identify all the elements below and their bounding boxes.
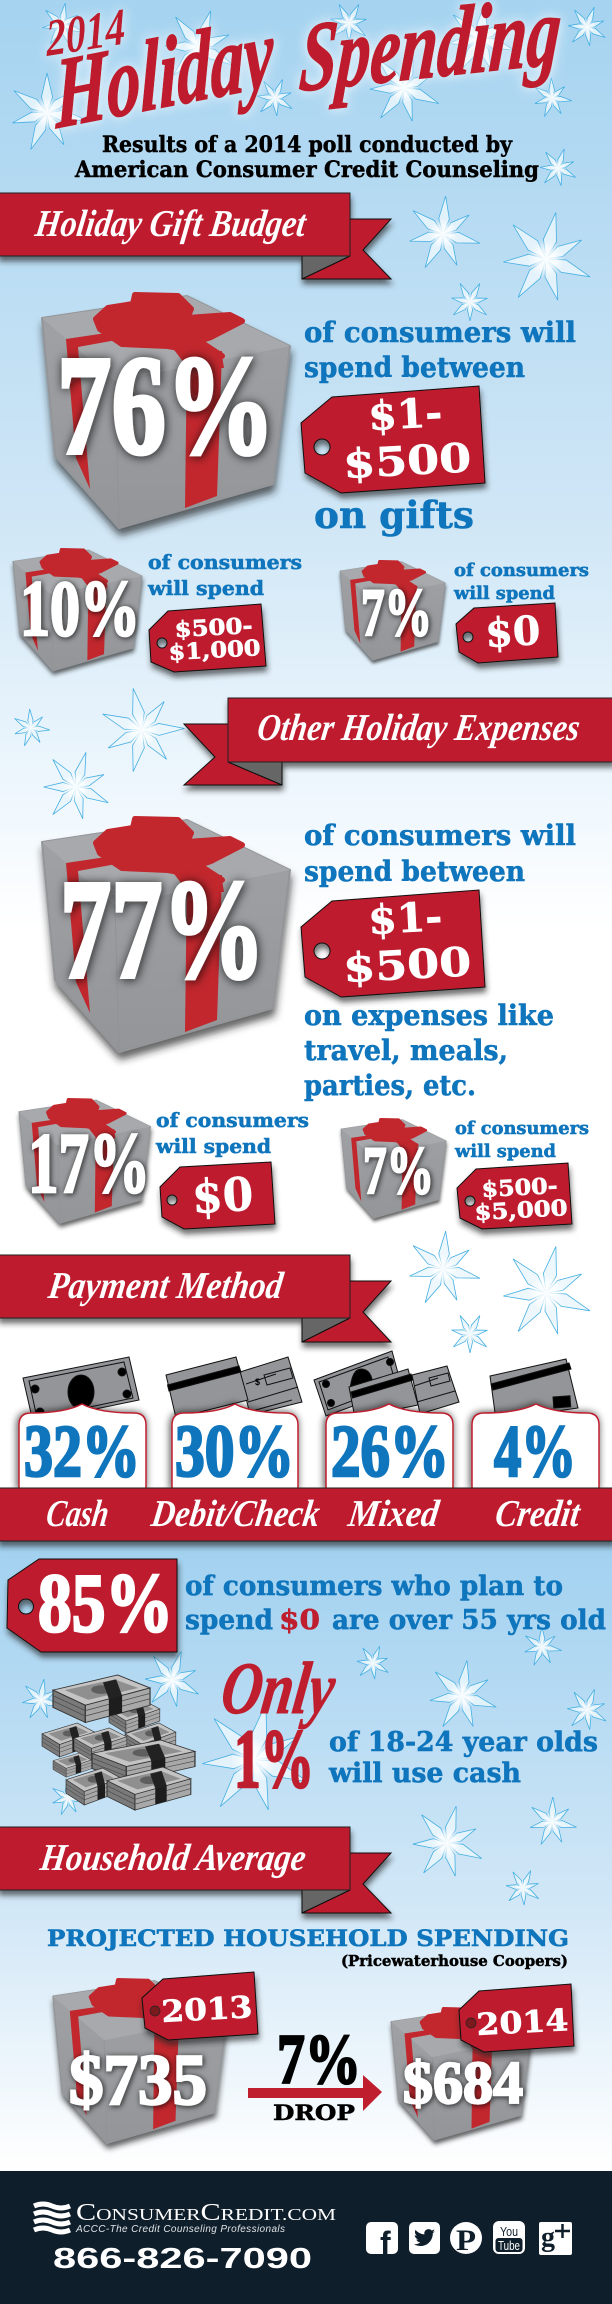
icon: facebook bbox=[366, 2222, 398, 2261]
payment method label band: Debit/Check bbox=[148, 1493, 323, 1535]
tag 2013 bbox=[142, 1972, 258, 2040]
payment method label band: Credit bbox=[493, 1493, 584, 1535]
text: on expenses like travel, meals, parties, etc.: travel, meals, bbox=[304, 1034, 508, 1067]
text: of consumers will spend between: spend between bbox=[304, 351, 525, 384]
arrow: 7% drop bbox=[248, 2021, 382, 2125]
tag 2014 bbox=[459, 1984, 574, 2052]
payment method label band: Cash bbox=[44, 1493, 112, 1535]
gift box 77%: 77% bbox=[60, 850, 265, 1008]
logo wordmark: CONSUMER CREDIT.COM bbox=[76, 2200, 336, 2226]
text: of consumers will spend (7%) bbox=[453, 560, 589, 604]
text: of consumers will spend between (77%): of consumers will bbox=[304, 819, 576, 852]
arrow: 7% drop: 7% bbox=[277, 2021, 361, 2099]
payment method label band bbox=[0, 1488, 612, 1541]
text: of 18-24 year olds will use cash: will use cash bbox=[328, 1758, 521, 1789]
text: 85% description: spend bbox=[185, 1605, 273, 1636]
ribbon heading: Household Average bbox=[0, 1827, 391, 1913]
icon: debit card and check: $ bbox=[255, 1377, 260, 1387]
ribbon heading: Other Holiday Expenses bbox=[184, 698, 612, 785]
heading: projected household spending: PROJECTED HOUSEHOLD SPENDING bbox=[47, 1926, 569, 1952]
text: of consumers will spend (10%): of consumers bbox=[148, 550, 302, 574]
text: of consumers will spend (17%): will spend bbox=[155, 1134, 271, 1158]
text: on expenses like travel, meals, parties, etc. bbox=[304, 999, 554, 1102]
card: cash 32%: 32% bbox=[24, 1411, 140, 1493]
icon: credit card bbox=[490, 1359, 578, 1420]
gift box 17% bbox=[19, 1100, 150, 1223]
icon: youtube: You bbox=[500, 2224, 518, 2239]
price tag $500-$1,000 bbox=[149, 604, 266, 672]
gift box 2013: $735 bbox=[53, 1972, 258, 2143]
gift box 7% bbox=[340, 561, 445, 660]
price tag $500-$1,000: $1,000 bbox=[168, 635, 261, 666]
gift box 7% (expenses) bbox=[341, 1119, 446, 1218]
ribbon heading: Payment Method bbox=[0, 1255, 391, 1342]
card: mixed 26%: 26% bbox=[331, 1411, 449, 1493]
text: of consumers will spend (7%): will spend bbox=[453, 583, 555, 604]
icon: pinterest: P bbox=[456, 2224, 476, 2257]
tag 2013: 2013 bbox=[161, 1990, 253, 2030]
price tag $1-$500 (expenses) bbox=[301, 890, 485, 997]
text: of consumers will spend (10%) bbox=[147, 550, 302, 600]
text: 85% description bbox=[185, 1571, 606, 1636]
price tag $1-$500 bbox=[301, 386, 485, 493]
card: credit 4%: 4% bbox=[494, 1411, 576, 1493]
price tag $1-$500: $1- bbox=[367, 389, 443, 440]
gift box 76%: 76% bbox=[57, 326, 275, 484]
price tag $500-$5,000: $5,000 bbox=[474, 1195, 568, 1226]
callout: Only 1%: 1% bbox=[234, 1713, 314, 1806]
upper background bbox=[0, 0, 612, 930]
gift box 17%: 17% bbox=[28, 1115, 150, 1211]
gift box 2013: $735: $735 bbox=[69, 2040, 207, 2120]
gift box 2014: $684: $684 bbox=[403, 2050, 523, 2116]
price tag $0 (17%): $0 bbox=[191, 1167, 254, 1224]
icon: debit card and check bbox=[166, 1357, 302, 1418]
icon: google plus bbox=[539, 2222, 572, 2255]
price tag $500-$5,000 bbox=[457, 1163, 572, 1229]
price tag $1-$500: $500 bbox=[342, 434, 472, 488]
panel: payment method percentages bbox=[19, 1404, 599, 1493]
ribbon heading: Household Average: Household Average bbox=[37, 1837, 309, 1879]
text: of 18-24 year olds will use cash bbox=[328, 1727, 598, 1789]
text: 85% description: $0 bbox=[279, 1605, 320, 1636]
gift box 77% bbox=[42, 819, 290, 1052]
text: on expenses like travel, meals, parties, etc.: on expenses like bbox=[304, 999, 554, 1032]
icon: twitter bbox=[409, 2222, 440, 2254]
lower background bbox=[0, 1541, 612, 2171]
text: of consumers will spend (7%): of consumers bbox=[454, 560, 589, 581]
gift box 10%: 10% bbox=[20, 566, 140, 653]
text: of consumers will spend (7% expenses) bbox=[454, 1118, 589, 1162]
price tag $500-$1,000: $500- bbox=[174, 613, 253, 643]
subtitle bbox=[74, 132, 539, 183]
logo tagline: ACCC-The Credit Counseling Professionals bbox=[75, 2224, 285, 2235]
text: 85% description: of consumers who plan to bbox=[185, 1571, 563, 1602]
text: on expenses like travel, meals, parties, etc.: parties, etc. bbox=[304, 1069, 476, 1102]
price tag $1-$500 (expenses): $1- bbox=[367, 893, 443, 944]
heading: projected household spending bbox=[47, 1926, 569, 1970]
title bbox=[44, 0, 565, 150]
text: of consumers will spend (7% expenses): of consumers bbox=[455, 1118, 589, 1139]
price tag $0 (17%) bbox=[160, 1162, 275, 1229]
icon: youtube: Tube bbox=[498, 2238, 520, 2253]
text: of consumers will spend (7% expenses): will spend bbox=[454, 1141, 556, 1162]
text: of consumers will spend (17%): of consumers bbox=[156, 1108, 309, 1132]
ribbon heading: Payment Method: Payment Method bbox=[45, 1265, 286, 1307]
gift box 2014: $684 bbox=[391, 1984, 574, 2140]
text: of 18-24 year olds will use cash: of 18-24 year olds bbox=[329, 1727, 598, 1758]
price tag 85%: 85% bbox=[38, 1557, 173, 1650]
phone number: 866-826-7090 bbox=[53, 2243, 312, 2275]
payment method label band: Mixed bbox=[345, 1493, 442, 1535]
text: of consumers will spend (17%) bbox=[155, 1108, 309, 1158]
price tag $0: $0 bbox=[484, 607, 541, 657]
text: on gifts: on gifts bbox=[314, 493, 474, 537]
text: of consumers will spend between (77%): spend between bbox=[304, 855, 525, 888]
gift box 7%: 7% bbox=[361, 574, 432, 650]
icon: youtube bbox=[493, 2221, 525, 2254]
text: of consumers will spend between: of consumers will bbox=[304, 316, 576, 349]
card: debit/check 30%: 30% bbox=[175, 1411, 294, 1493]
heading: projected household spending: (Pricewaterhouse Coopers) bbox=[341, 1952, 568, 1970]
price tag 85% bbox=[7, 1557, 177, 1652]
icon: pinterest bbox=[450, 2222, 482, 2257]
icon: google plus: g bbox=[541, 2222, 555, 2253]
white middle background bbox=[0, 930, 612, 1541]
icon: cash bbox=[23, 1357, 139, 1422]
logo waves bbox=[34, 2204, 70, 2232]
price tag $1-$500 (expenses): $500 bbox=[342, 938, 472, 992]
text: 85% description: are over 55 yrs old bbox=[332, 1605, 606, 1636]
gift box 76% bbox=[42, 295, 290, 528]
icon: facebook: f bbox=[380, 2225, 391, 2261]
text: of consumers will spend between bbox=[304, 316, 576, 384]
arrow: 7% drop: DROP bbox=[273, 2100, 355, 2125]
tag 2014: 2014 bbox=[476, 2003, 569, 2043]
ribbon heading: Holiday Gift Budget: Holiday Gift Budget bbox=[32, 203, 310, 245]
callout: Only 1% bbox=[217, 1648, 341, 1806]
text: of consumers will spend (10%): will spend bbox=[147, 576, 264, 600]
subtitle: Results of a 2014 poll conducted by bbox=[102, 132, 513, 158]
callout: Only 1%: Only bbox=[217, 1648, 341, 1730]
subtitle: American Consumer Credit Counseling bbox=[74, 157, 539, 183]
ribbon heading: Holiday Gift Budget bbox=[0, 193, 391, 279]
text: of consumers will spend between (77%) bbox=[304, 819, 576, 888]
price tag $0 bbox=[456, 603, 558, 663]
icon: cash, card and check mix bbox=[314, 1351, 459, 1418]
price tag $500-$5,000: $500- bbox=[481, 1173, 558, 1203]
footer bbox=[0, 2171, 612, 2304]
icon: pile of money bbox=[42, 1675, 195, 1810]
gift box 10% bbox=[13, 550, 142, 671]
gift box 7% (expenses): 7% bbox=[363, 1132, 434, 1208]
